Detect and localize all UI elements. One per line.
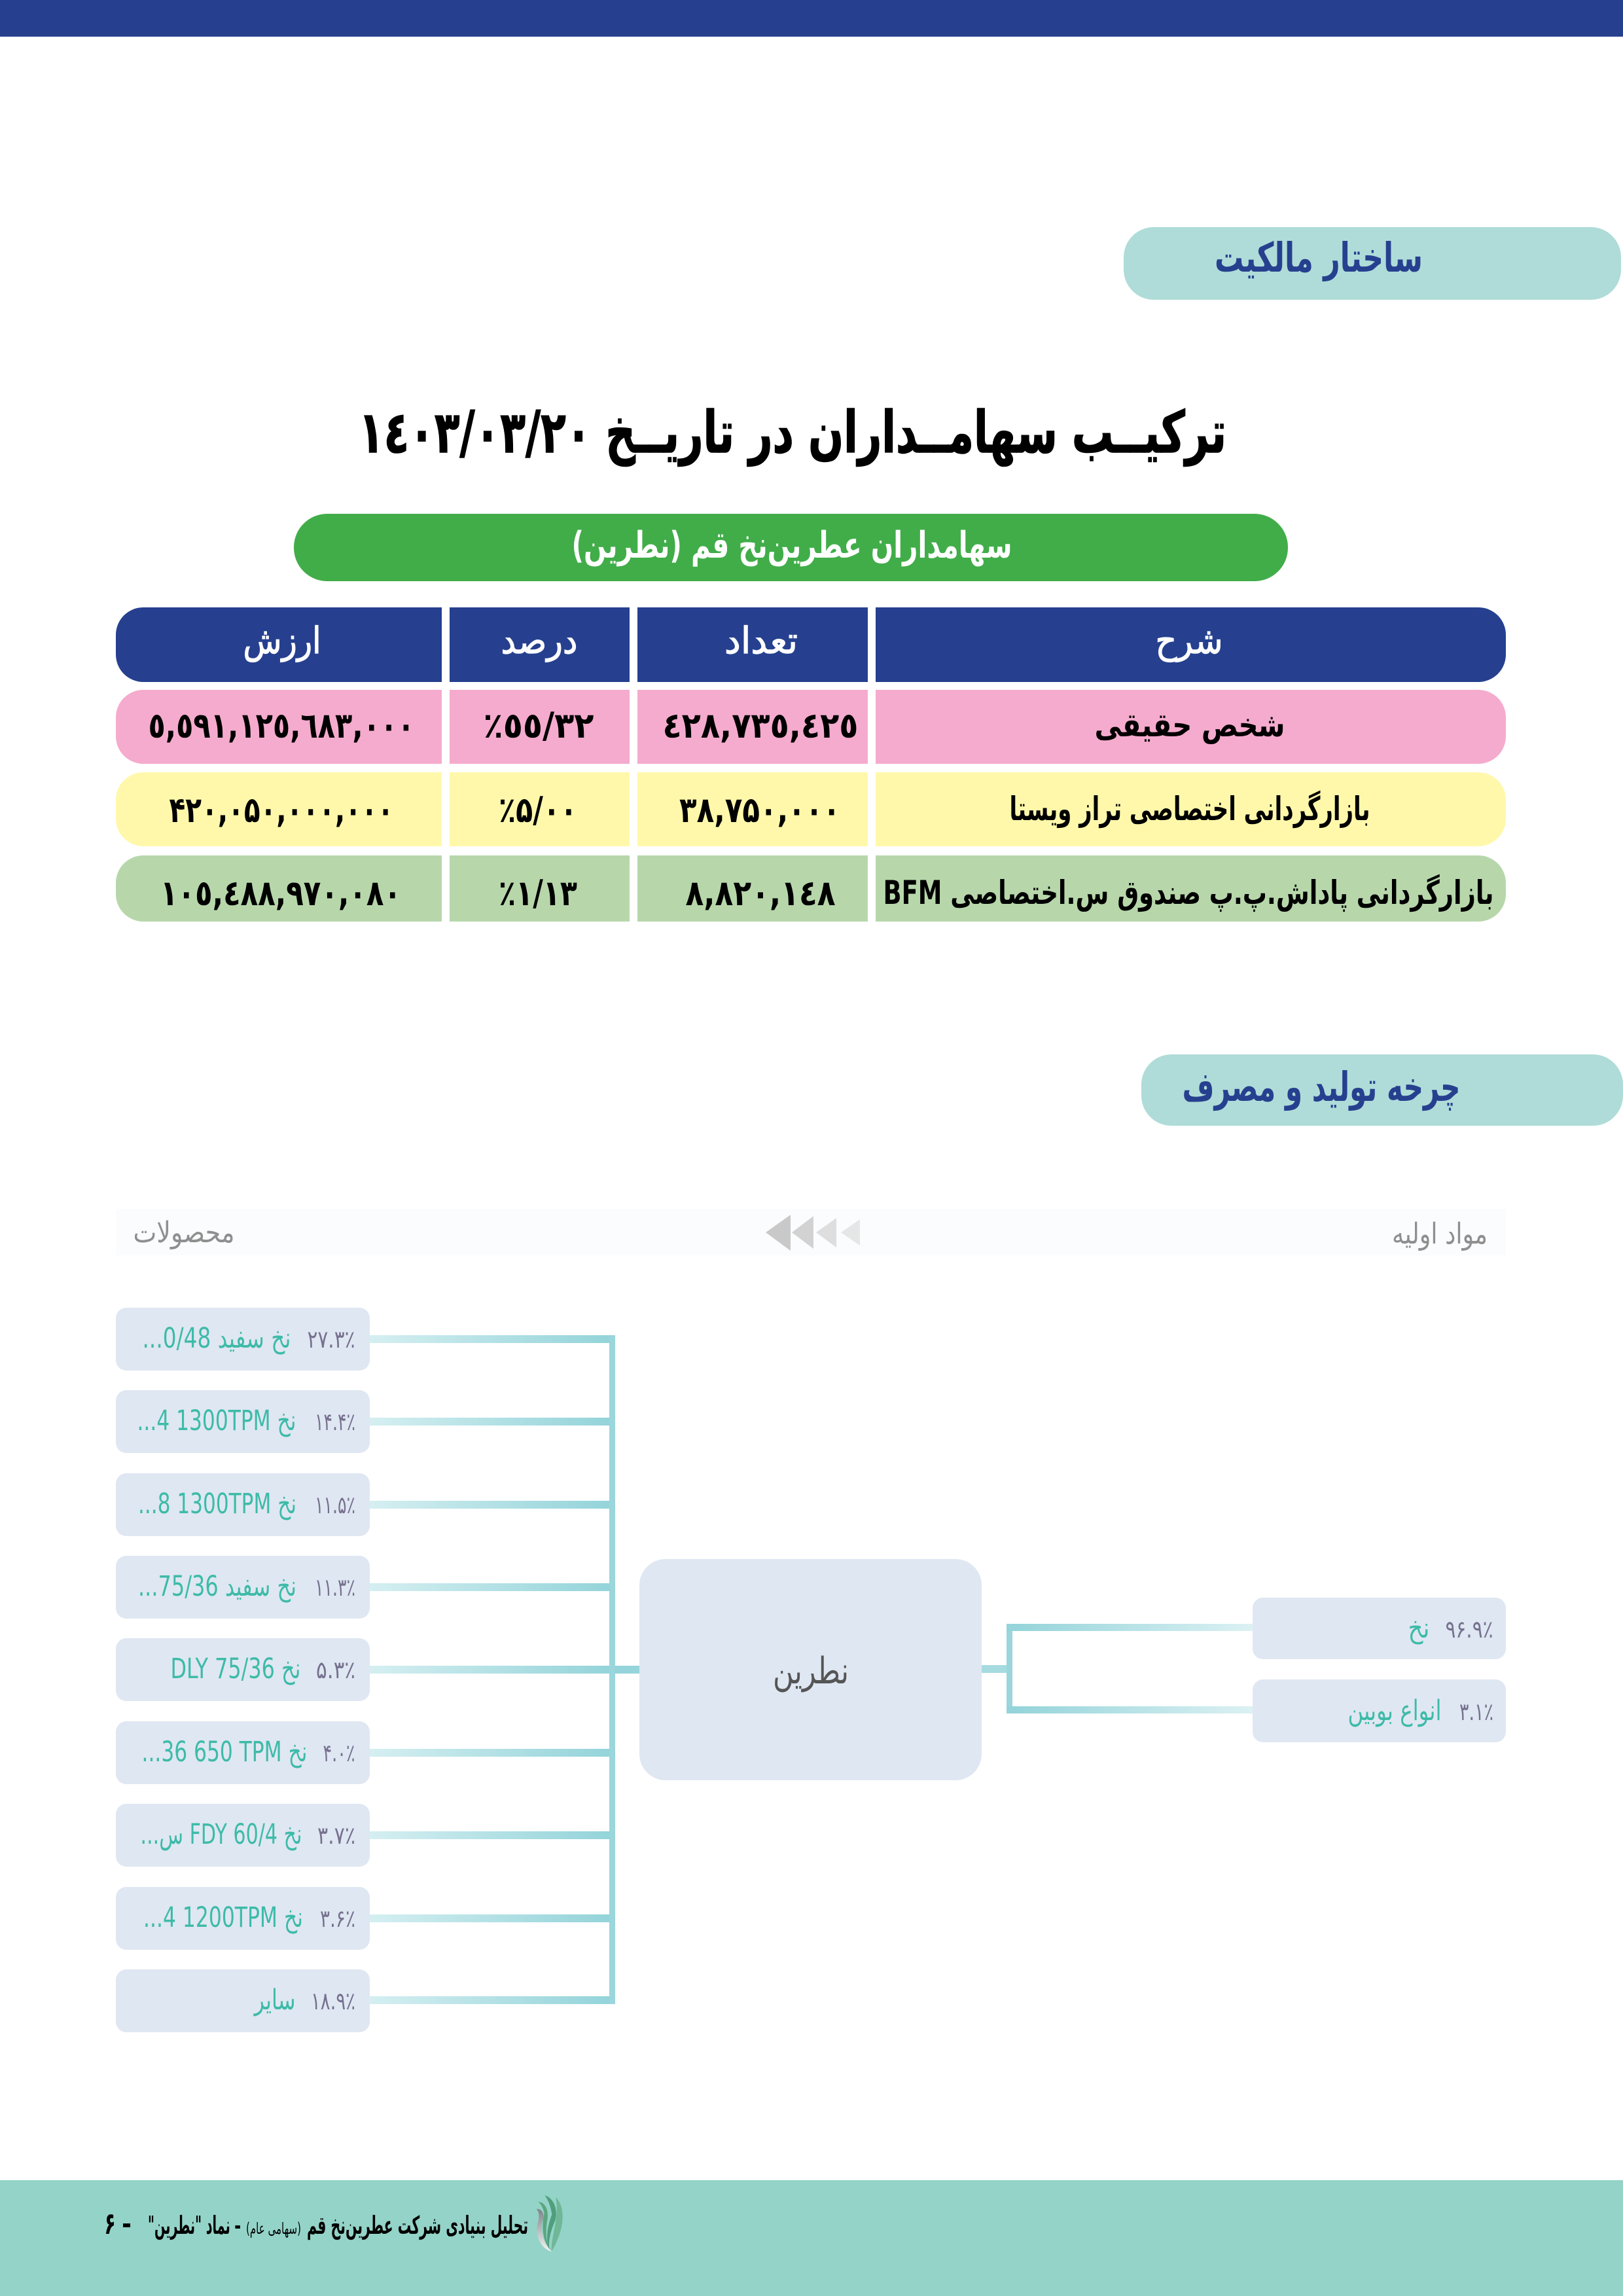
footer company type: (سهامی عام): [246, 2219, 301, 2238]
connectors: company to raw materials: [982, 1624, 1253, 1713]
product: yarn 1200TPM 4: نخ ‪4 1200TPM‬...: [143, 1901, 303, 1934]
footer title: تحلیل بنیادی شرکت عطرین‌نخ قم: [307, 2211, 528, 2240]
section heading: ownership structure: [1124, 227, 1621, 300]
product: yarn 1300TPM 8: [116, 1473, 370, 1536]
chart header strip: محصولات: [134, 1216, 234, 1249]
product: DLY 75/36: نخ DLY 75/36: [170, 1653, 301, 1685]
product: yarn 1300TPM 4: نخ ‪4 1300TPM‬...: [137, 1405, 296, 1437]
product: DLY 75/36: ۵.۳٪: [316, 1656, 355, 1684]
row: Padash BFM market maker: ٪١/١٣: [499, 872, 577, 914]
product: other: سایر: [253, 1984, 296, 2017]
raw material: yarn: نخ: [1408, 1612, 1429, 1645]
row: natural persons: [116, 690, 1506, 764]
row: Padash BFM market maker: ٨,٨٢٠,١٤٨: [686, 872, 836, 914]
subtitle pill: [294, 514, 1288, 581]
raw material: bobbins: ۳.۱٪: [1459, 1698, 1493, 1726]
product: white yarn 0/48: ۲۷.۳٪: [308, 1325, 355, 1354]
section heading: ownership structure: ساختار مالکیت: [1215, 234, 1423, 281]
arrows pointing left: [766, 1215, 860, 1251]
table header row: [116, 607, 1506, 682]
connectors: products to company: [370, 1335, 639, 2004]
raw material: yarn: ۹۶.۹٪: [1445, 1615, 1493, 1643]
row: Taraz Vista market maker: بازارگردانی اختصاصی تراز ویستا: [1009, 790, 1370, 829]
title: ترکیــب سهامــداران در تاریــخ ١٤٠٣/٠٣/٢٠: [359, 399, 1226, 467]
product: FDY 60/4: ۳.۷٪: [317, 1821, 355, 1850]
table header row: درصد: [501, 620, 577, 662]
raw material: bobbins: [1253, 1679, 1506, 1742]
product: yarn 1300TPM 8: ۱۱.۵٪: [315, 1491, 355, 1519]
chart header strip: مواد اولیه: [1392, 1217, 1488, 1251]
row: Padash BFM market maker: [116, 855, 1506, 922]
row: Taraz Vista market maker: ۳۸,۷۵۰,۰۰۰: [679, 789, 840, 831]
product: DLY 75/36: [116, 1638, 370, 1701]
row: natural persons: ٥,٥٩١,١٢٥,٦٨٣,٠٠٠: [148, 705, 415, 746]
product: yarn 1300TPM 8: نخ ‪8 1300TPM‬...: [138, 1488, 296, 1520]
product: other: ۱۸.۹٪: [311, 1987, 355, 2015]
shareholders table: [116, 607, 1506, 922]
row: Taraz Vista market maker: [116, 772, 1506, 846]
table header row: ارزش: [243, 620, 321, 662]
top bar: [0, 0, 1623, 37]
table header row: شرح: [1156, 620, 1222, 662]
product: FDY 60/4: [116, 1804, 370, 1867]
product: yarn 36 650 TPM: ۴.۰٪: [323, 1739, 355, 1767]
row: Taraz Vista market maker: ٪۵/۰۰: [499, 789, 577, 831]
row: Padash BFM market maker: ١٠٥,٤٨٨,٩٧٠,٠٨٠: [160, 872, 401, 914]
company node: [639, 1559, 982, 1780]
footer: [0, 2180, 1623, 2296]
product: white yarn 0/48: [116, 1308, 370, 1371]
product: white yarn 75/36: نخ سفید 75/36...: [138, 1570, 296, 1603]
raw material: yarn: [1253, 1598, 1506, 1659]
product: yarn 1200TPM 4: [116, 1887, 370, 1950]
row: natural persons: شخص حقیقی: [1094, 706, 1285, 744]
chart: production-consumption flow: [116, 1209, 1506, 2032]
product: yarn 1300TPM 4: ۱۴.۴٪: [315, 1408, 355, 1436]
raw material: bobbins: انواع بوبین: [1348, 1695, 1441, 1727]
table header row: تعداد: [724, 620, 798, 662]
subtitle pill: سهامداران عطرین‌نخ قم (نطرین): [572, 524, 1012, 567]
section heading: production and consumption cycle: [1141, 1054, 1623, 1126]
product: other: [116, 1969, 370, 2032]
section heading: production and consumption cycle: چرخه تولید و مصرف: [1182, 1063, 1461, 1111]
product: yarn 1200TPM 4: ۳.۶٪: [320, 1905, 355, 1933]
product: white yarn 75/36: ۱۱.۳٪: [315, 1573, 355, 1602]
page number: – ۶: [105, 2206, 131, 2241]
company node: نطرین: [773, 1650, 849, 1693]
row: natural persons: ٪٥٥/٣٢: [483, 705, 594, 746]
product: FDY 60/4: نخ FDY 60/4 س...: [140, 1818, 302, 1851]
row: Taraz Vista market maker: ۴۲۰,۰۵۰,۰۰۰,۰۰۰: [169, 789, 394, 831]
row: natural persons: ٤٢٨,٧٣٥,٤٢٥: [662, 705, 859, 746]
product: yarn 36 650 TPM: نخ ‪36 650 TPM‬...: [141, 1736, 308, 1768]
icon: logo leaves: [537, 2195, 563, 2251]
product: white yarn 0/48: نخ سفید 0/48...: [143, 1322, 291, 1355]
product: yarn 36 650 TPM: [116, 1721, 370, 1784]
footer ticker: – نماد "نطرین": [148, 2211, 241, 2240]
product: yarn 1300TPM 4: [116, 1390, 370, 1453]
product: white yarn 75/36: [116, 1556, 370, 1619]
chart header strip: [116, 1209, 1506, 1255]
